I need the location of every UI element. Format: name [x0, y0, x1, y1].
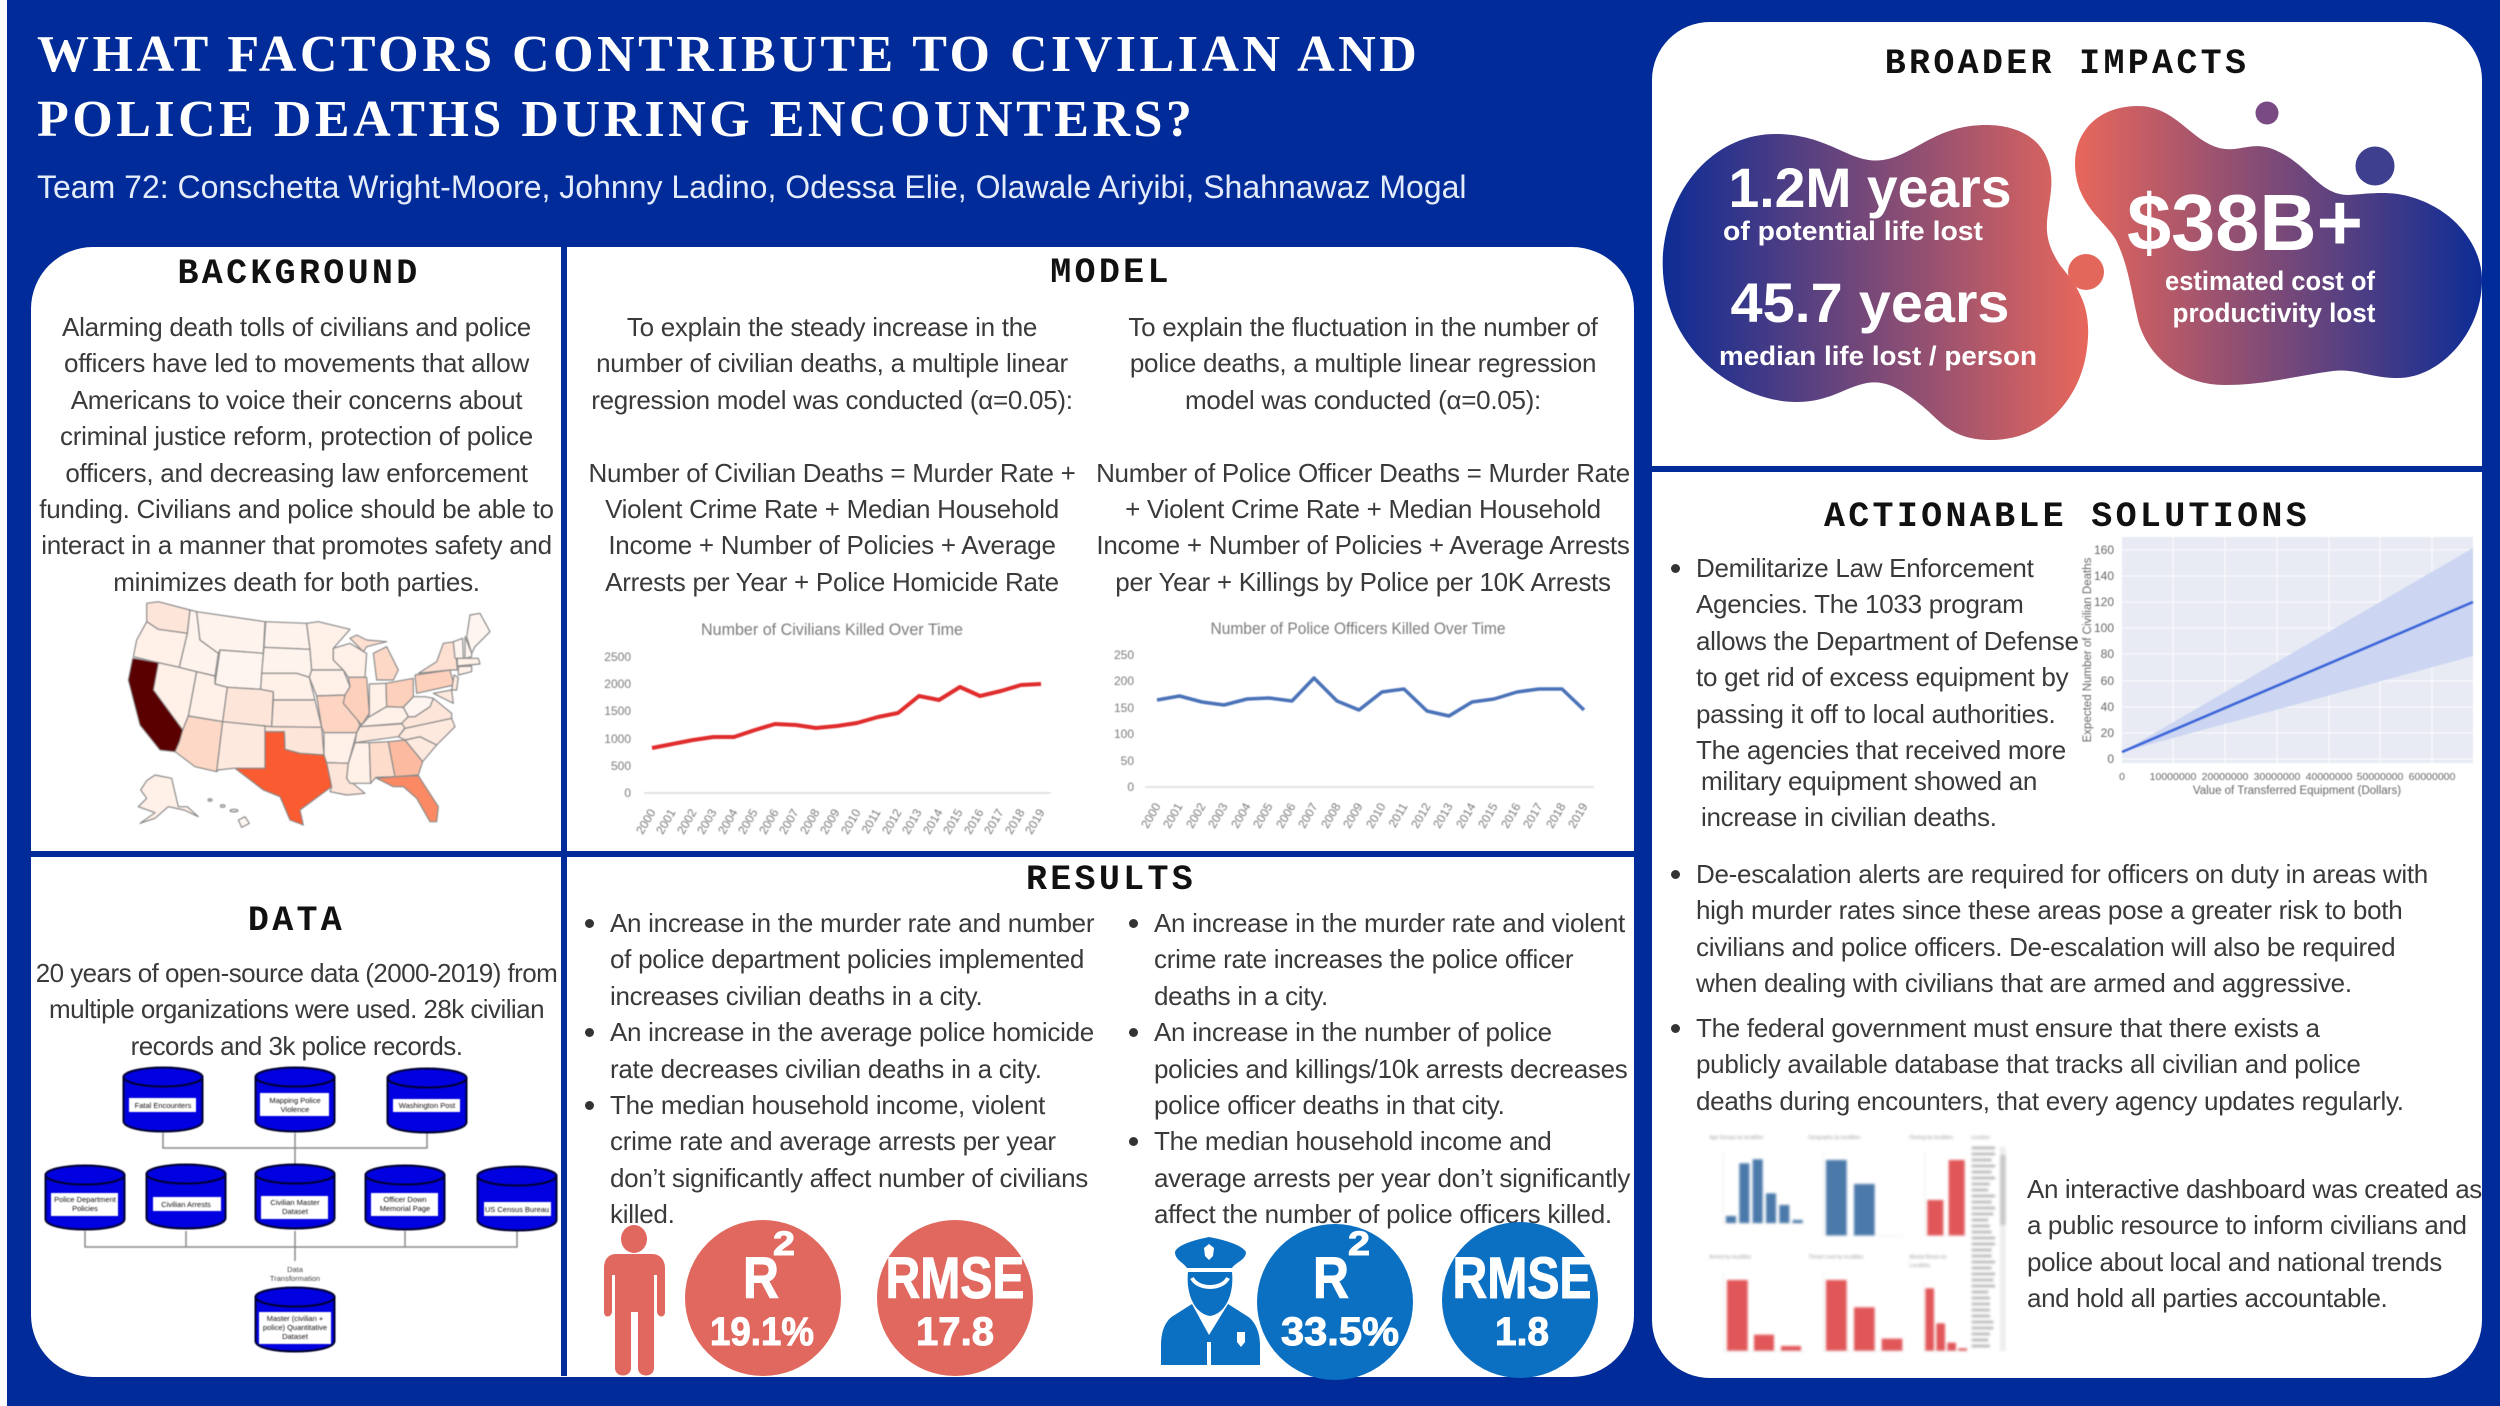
- text: background: interact in a manner that promotes safety and: [41, 530, 552, 560]
- line chart: police officers killed: 100: [1114, 727, 1134, 741]
- chart: equipment value vs civilian deaths: 160: [2094, 543, 2114, 557]
- text: civilian results: An increase in the murder rate and number: [610, 908, 1094, 938]
- line chart: police officers killed: 2008: [1318, 800, 1344, 831]
- text: civilian model: Number of Civilian Deaths = Murder Rate +: [588, 458, 1076, 488]
- line chart: civilians killed: [604, 620, 1052, 837]
- line chart: police officers killed: [1114, 619, 1594, 831]
- text: police results: An increase in the number of police: [1154, 1017, 1552, 1047]
- text: civilian results: of police department policies implemented: [610, 944, 1084, 974]
- text: data: records and 3k police records.: [131, 1031, 462, 1061]
- line chart: civilians killed: 0: [624, 786, 631, 800]
- dashboard thumbnail: Localities: [1909, 1263, 1931, 1269]
- text: police results: police officer deaths in that city.: [1154, 1090, 1505, 1120]
- heading: broader impacts: BROADER IMPACTS: [1885, 44, 2249, 84]
- text: civilian model: Arrests per Year + Police Homicide Rate: [605, 567, 1059, 597]
- line chart: civilians killed: 2014: [920, 806, 946, 837]
- text: civilian results: rate decreases civilian deaths in a city.: [610, 1054, 1042, 1084]
- text: civilian model: number of civilian deaths, a multiple linear: [596, 348, 1068, 378]
- line chart: police officers killed: 2015: [1475, 800, 1501, 831]
- diagram: data flow: Master (civilian +: [267, 1314, 324, 1323]
- text: police model: model was conducted (α=0.05):: [1185, 385, 1541, 415]
- line chart: civilians killed: 2015: [940, 806, 966, 837]
- text: background: officers, and decreasing law enforcement: [65, 458, 528, 488]
- line chart: civilians killed: 2009: [817, 806, 843, 837]
- text: background: criminal justice reform, protection of police: [60, 421, 533, 451]
- line chart: civilians killed: 2017: [981, 806, 1007, 837]
- text: demilitarize solution: allows the Department of Defense: [1696, 626, 2079, 656]
- chart: equipment value vs civilian deaths: 120: [2094, 595, 2114, 609]
- chart: equipment value vs civilian deaths: 60: [2101, 674, 2114, 688]
- text: civilian results: An increase in the average police homicide: [610, 1017, 1094, 1047]
- line chart: police officers killed: 200: [1114, 674, 1134, 688]
- text: de-escalation solution: civilians and police officers. De-escalation will also be required: [1696, 932, 2395, 962]
- stat: police RMSE: 1.8: [1495, 1310, 1549, 1354]
- text: police model: Number of Police Officer Deaths = Murder Rate: [1096, 458, 1630, 488]
- line chart: police officers killed: 150: [1114, 701, 1134, 715]
- line chart: police officers killed: 2017: [1520, 800, 1546, 831]
- line chart: police officers killed: 2009: [1340, 800, 1366, 831]
- graphic: life lost blob: 1.2M years: [1728, 156, 2012, 219]
- diagram: data flow: Memorial Page: [380, 1204, 430, 1213]
- text: police model: per Year + Killings by Police per 10K Arrests: [1115, 567, 1611, 597]
- text: dashboard description: and hold all parties accountable.: [2027, 1283, 2387, 1313]
- line chart: civilians killed: 2004: [715, 806, 741, 837]
- chart: equipment value vs civilian deaths: 80: [2101, 647, 2114, 661]
- text: civilian model: Income + Number of Policies + Average: [608, 530, 1056, 560]
- line chart: police officers killed: 2019: [1565, 800, 1591, 831]
- line chart: civilians killed: 500: [611, 759, 631, 773]
- chart: equipment value vs civilian deaths: 60000000: [2409, 771, 2456, 783]
- line chart: civilians killed: 2002: [674, 806, 700, 837]
- text: demilitarize solution: The agencies that received more: [1696, 735, 2066, 765]
- dashboard thumbnail: Geography by localities: [1808, 1135, 1861, 1141]
- text: data: multiple organizations were used. 28k civilian: [49, 994, 544, 1024]
- line chart: civilians killed: 2500: [604, 650, 631, 664]
- text: federal database solution: publicly available database that tracks all civilian and police: [1696, 1049, 2361, 1079]
- diagram: data flow: Mapping Police: [269, 1096, 321, 1105]
- text: police model: Income + Number of Policies + Average Arrests: [1096, 530, 1630, 560]
- stat: police R squared: R: [1313, 1246, 1349, 1311]
- chart: equipment value vs civilian deaths: 20000000: [2202, 771, 2249, 783]
- text: data: 20 years of open-source data (2000-2019) from: [36, 958, 557, 988]
- text: civilian results: don’t significantly affect number of civilians: [610, 1163, 1088, 1193]
- line chart: police officers killed: 2005: [1250, 800, 1276, 831]
- heading: data: DATA: [248, 901, 345, 941]
- text: demilitarize solution: Demilitarize Law Enforcement: [1696, 553, 2034, 583]
- dashboard thumbnail: [1708, 1134, 2007, 1353]
- team credits: Team 72: Conschetta Wright-Moore, Johnny Ladino, Odessa Elie, Olawale Ariyibi, Shahnawaz Mogal: [37, 169, 1466, 205]
- diagram: data flow: US Census Bureau: [485, 1205, 549, 1214]
- stat: civilian RMSE: 17.8: [916, 1310, 994, 1354]
- icon: police officer: [1161, 1237, 1260, 1365]
- text: background: Alarming death tolls of civilians and police: [62, 312, 531, 342]
- heading: results: RESULTS: [1026, 860, 1196, 900]
- diagram: data flow: Transformation: [270, 1274, 320, 1283]
- title: [37, 26, 1420, 148]
- chart: equipment value vs civilian deaths: 10000000: [2150, 771, 2197, 783]
- text: dashboard description: a public resource to inform civilians and: [2027, 1210, 2467, 1240]
- text: de-escalation solution: high murder rates since these areas pose a greater risk to both: [1696, 895, 2402, 925]
- graphic: life lost blob: 45.7 years: [1730, 271, 2010, 334]
- text: demilitarize solution: increase in civilian deaths.: [1701, 802, 1997, 832]
- line chart: civilians killed: 1000: [604, 732, 631, 746]
- line chart: civilians killed: 2000: [604, 677, 631, 691]
- line chart: police officers killed: 2002: [1183, 800, 1209, 831]
- text: de-escalation solution: De-escalation alerts are required for officers on duty in areas with: [1696, 859, 2428, 889]
- text: police results: affect the number of police officers killed.: [1154, 1199, 1612, 1229]
- text: police results: crime rate increases the police officer: [1154, 944, 1573, 974]
- line chart: civilians killed: Number of Civilians Killed Over Time: [701, 620, 963, 639]
- stat: civilian R squared: [685, 1220, 841, 1376]
- chart: equipment value vs civilian deaths: 100: [2094, 621, 2114, 635]
- stat: civilian RMSE: RMSE: [886, 1246, 1024, 1311]
- line chart: police officers killed: Number of Police Officers Killed Over Time: [1210, 619, 1506, 638]
- stat: police R squared: 2: [1348, 1225, 1370, 1263]
- stat: police RMSE: [1442, 1222, 1598, 1378]
- line chart: police officers killed: 2012: [1408, 800, 1434, 831]
- line chart: civilians killed: 2010: [838, 806, 864, 837]
- stat: police RMSE: RMSE: [1452, 1246, 1592, 1311]
- panel: main research board: [31, 247, 1634, 1377]
- dashboard thumbnail: Armed by localities: [1709, 1255, 1752, 1261]
- text: civilian model: regression model was conducted (α=0.05):: [591, 385, 1073, 415]
- text: police model: police deaths, a multiple linear regression: [1130, 348, 1596, 378]
- graphic: productivity cost blob: $38B+: [2127, 178, 2363, 267]
- chart: equipment value vs civilian deaths: 40000000: [2306, 771, 2353, 783]
- line chart: police officers killed: 2006: [1273, 800, 1299, 831]
- text: federal database solution: [1671, 1013, 2404, 1116]
- diagram: data flow: Police Department: [54, 1195, 117, 1204]
- graphic: productivity cost blob: [2075, 102, 2482, 385]
- graphic: life lost blob: of potential life lost: [1723, 216, 1983, 246]
- dashboard thumbnail: Mental Illness by: [1909, 1255, 1947, 1261]
- chart: equipment value vs civilian deaths: Expected Number of Civilian Deaths: [2082, 557, 2094, 742]
- line chart: police officers killed: 50: [1121, 754, 1134, 768]
- text: civilian results: [585, 908, 1094, 1229]
- line chart: civilians killed: 2007: [776, 806, 802, 837]
- graphic: life lost blob: [1662, 125, 2104, 440]
- text: police results: deaths in a city.: [1154, 981, 1328, 1011]
- text: demilitarize solution: Agencies. The 1033 program: [1696, 589, 2024, 619]
- icon: civilian person: [604, 1225, 665, 1376]
- line chart: civilians killed: 2001: [653, 806, 679, 837]
- text: civilian results: The median household income, violent: [610, 1090, 1045, 1120]
- chart: equipment value vs civilian deaths: 0: [2107, 752, 2114, 766]
- text: police results: [1129, 908, 1630, 1229]
- graphic: productivity cost blob: estimated cost of: [2165, 266, 2376, 296]
- heading: actionable solutions: ACTIONABLE SOLUTIONS: [1824, 497, 2310, 537]
- line chart: civilians killed: 2013: [899, 806, 925, 837]
- chart: equipment value vs civilian deaths: 40: [2101, 700, 2114, 714]
- line chart: police officers killed: 2016: [1498, 800, 1524, 831]
- text: background: minimizes death for both parties.: [113, 567, 480, 597]
- line chart: police officers killed: 0: [1127, 780, 1134, 794]
- line chart: civilians killed: 2005: [735, 806, 761, 837]
- line chart: police officers killed: 250: [1114, 648, 1134, 662]
- diagram: data flow: police) Quantitative: [263, 1323, 327, 1332]
- text: background: officers have led to movements that allow: [64, 348, 529, 378]
- line chart: civilians killed: 2006: [756, 806, 782, 837]
- diagram: data flow: Officer Down: [383, 1195, 427, 1204]
- line chart: police officers killed: 2001: [1160, 800, 1186, 831]
- text: civilian model: [588, 312, 1076, 597]
- text: civilian model: Violent Crime Rate + Median Household: [605, 494, 1059, 524]
- text: background: Americans to voice their concerns about: [71, 385, 522, 415]
- line chart: civilians killed: 2000: [633, 806, 659, 837]
- diagram: data flow: Policies: [72, 1204, 98, 1213]
- text: data: [36, 958, 557, 1061]
- stat: civilian R squared: R: [743, 1246, 779, 1311]
- text: police results: An increase in the murder rate and violent: [1154, 908, 1625, 938]
- stat: civilian R squared: 2: [773, 1225, 795, 1263]
- line chart: police officers killed: 2010: [1363, 800, 1389, 831]
- line chart: civilians killed: 2012: [879, 806, 905, 837]
- chart: equipment value vs civilian deaths: 50000000: [2357, 771, 2404, 783]
- dashboard thumbnail: Age Groups by localities: [1709, 1135, 1764, 1141]
- diagram: data flow: Civilian Master: [270, 1198, 320, 1207]
- heading: background: BACKGROUND: [177, 254, 421, 294]
- diagram: data flow: Violence: [281, 1105, 309, 1114]
- stat: police R squared: 33.5%: [1281, 1310, 1399, 1354]
- panel: right impacts board: [1652, 22, 2482, 1378]
- map: US states choropleth: [127, 600, 491, 828]
- text: demilitarize solution: to get rid of excess equipment by: [1696, 662, 2068, 692]
- text: civilian results: increases civilian deaths in a city.: [610, 981, 982, 1011]
- title: WHAT FACTORS CONTRIBUTE TO CIVILIAN AND: [37, 26, 1420, 83]
- chart: equipment value vs civilian deaths: Value of Transferred Equipment (Dollars): [2193, 785, 2401, 797]
- heading: model: MODEL: [1050, 253, 1172, 293]
- text: police model: + Violent Crime Rate + Median Household: [1125, 494, 1601, 524]
- diagram: data flow: Dataset: [282, 1207, 309, 1216]
- chart: equipment value vs civilian deaths: [2081, 537, 2474, 797]
- text: de-escalation solution: [1671, 859, 2428, 998]
- title: POLICE DEATHS DURING ENCOUNTERS?: [37, 91, 1195, 148]
- line chart: civilians killed: 2018: [1002, 806, 1028, 837]
- line chart: civilians killed: 2003: [694, 806, 720, 837]
- line chart: police officers killed: 2003: [1205, 800, 1231, 831]
- graphic: productivity cost blob: productivity lost: [2172, 298, 2376, 328]
- text: federal database solution: The federal government must ensure that there exists a: [1696, 1013, 2320, 1043]
- text: background: funding. Civilians and police should be able to: [39, 494, 554, 524]
- line chart: civilians killed: 2016: [961, 806, 987, 837]
- diagram: data flow: Washington Post: [399, 1101, 456, 1110]
- text: dashboard description: police about local and national trends: [2027, 1247, 2442, 1277]
- text: dashboard description: [2027, 1174, 2482, 1313]
- chart: equipment value vs civilian deaths: 20: [2101, 726, 2114, 740]
- chart: equipment value vs civilian deaths: 140: [2094, 569, 2114, 583]
- dashboard thumbnail: Location: [1971, 1135, 1990, 1141]
- line chart: civilians killed: 2008: [797, 806, 823, 837]
- line chart: police officers killed: 2004: [1228, 800, 1254, 831]
- line chart: civilians killed: 2011: [859, 806, 884, 836]
- text: background: [39, 312, 554, 597]
- line chart: police officers killed: 2007: [1295, 800, 1321, 831]
- line chart: police officers killed: 2000: [1138, 800, 1164, 831]
- chart: equipment value vs civilian deaths: 0: [2119, 771, 2125, 783]
- text: police results: policies and killings/10k arrests decreases: [1154, 1054, 1628, 1084]
- diagram: data flow: Dataset: [282, 1332, 309, 1341]
- dashboard thumbnail: Threat Level by localities: [1808, 1255, 1864, 1261]
- stat: civilian R squared: 19.1%: [710, 1310, 814, 1354]
- text: demilitarize solution: [1671, 553, 2079, 832]
- text: civilian results: crime rate and average arrests per year: [610, 1126, 1056, 1156]
- line chart: police officers killed: 2014: [1453, 800, 1479, 831]
- graphic: life lost blob: median life lost / person: [1719, 341, 2037, 371]
- line chart: civilians killed: 2019: [1022, 806, 1048, 837]
- text: police model: [1096, 312, 1630, 597]
- line chart: police officers killed: 2018: [1543, 800, 1569, 831]
- text: police results: The median household income and: [1154, 1126, 1551, 1156]
- text: federal database solution: deaths during encounters, that every agency updates regularly.: [1696, 1086, 2404, 1116]
- text: civilian results: killed.: [610, 1199, 675, 1229]
- diagram: data flow: Fatal Encounters: [135, 1101, 192, 1110]
- text: demilitarize solution: military equipment showed an: [1701, 766, 2037, 796]
- line chart: police officers killed: 2013: [1430, 800, 1456, 831]
- stat: police R squared: [1257, 1224, 1413, 1380]
- diagram: data flow: Data: [287, 1265, 304, 1274]
- diagram: data flow: [44, 1066, 558, 1354]
- chart: equipment value vs civilian deaths: 30000000: [2254, 771, 2301, 783]
- stat: civilian RMSE: [877, 1220, 1033, 1376]
- text: dashboard description: An interactive dashboard was created as: [2027, 1174, 2482, 1204]
- text: demilitarize solution: passing it off to local authorities.: [1696, 699, 2055, 729]
- text: de-escalation solution: when dealing with civilians that are armed and aggressive.: [1696, 968, 2352, 998]
- line chart: police officers killed: 2011: [1386, 800, 1411, 830]
- text: civilian model: To explain the steady increase in the: [627, 312, 1037, 342]
- diagram: data flow: Civilian Arrests: [161, 1200, 211, 1209]
- text: police results: average arrests per year don’t significantly: [1154, 1163, 1630, 1193]
- line chart: civilians killed: 1500: [604, 704, 631, 718]
- dashboard thumbnail: Fleeing by localities: [1909, 1135, 1953, 1141]
- text: police model: To explain the fluctuation in the number of: [1128, 312, 1598, 342]
